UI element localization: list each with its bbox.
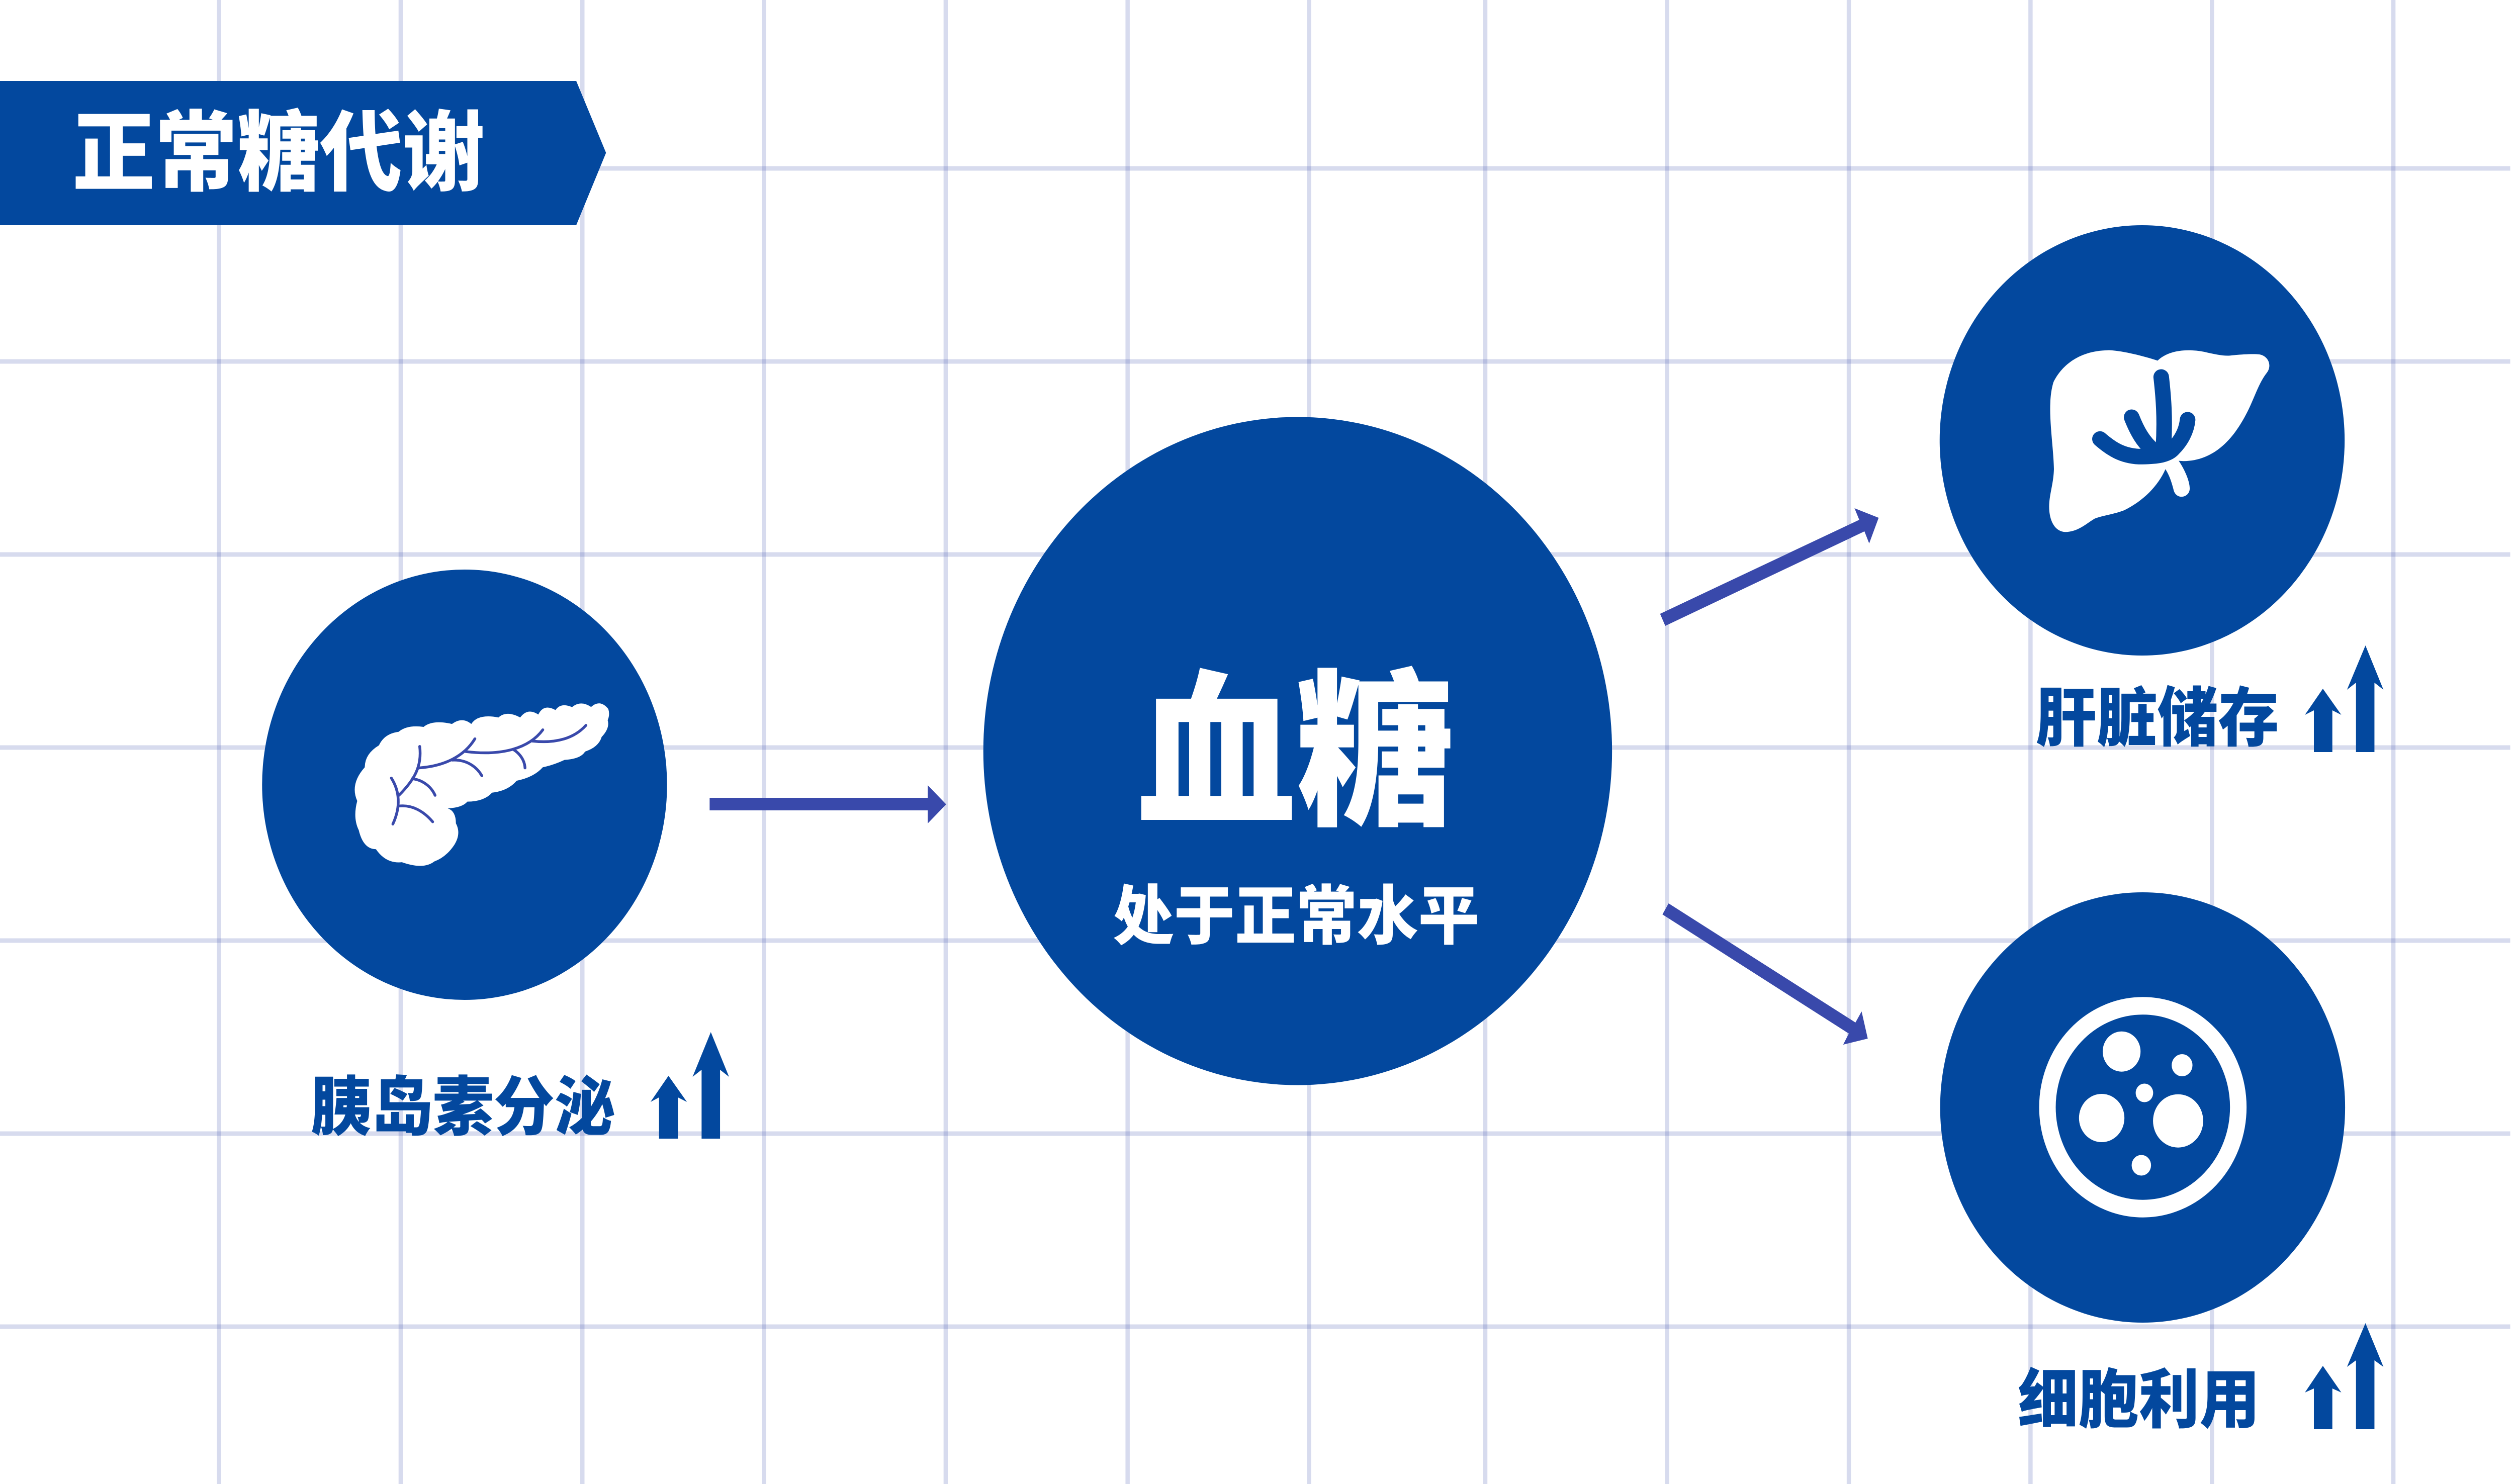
label: cell utilization: 细胞利用 bbox=[2018, 1365, 2260, 1436]
panel: cell circle bbox=[1940, 892, 2345, 1323]
text: at normal level: 处于正常水平 bbox=[1113, 881, 1479, 953]
icon: up arrows cell bbox=[2305, 1323, 2383, 1429]
icon: up arrows insulin bbox=[651, 1032, 729, 1139]
icon: pancreas bbox=[354, 703, 609, 866]
arrow: blood sugar to liver bbox=[1660, 508, 1878, 626]
icon: liver bbox=[2049, 350, 2269, 532]
panel: blood sugar circle bbox=[983, 417, 1612, 1085]
title text: 正常糖代谢 bbox=[72, 104, 485, 202]
arrow: pancreas to blood sugar bbox=[709, 785, 946, 823]
icon: cell bbox=[2047, 1006, 2238, 1209]
title banner bbox=[0, 81, 606, 225]
label: insulin secretion: 胰岛素分泌 bbox=[311, 1072, 615, 1144]
heading: blood sugar: 血糖 bbox=[1137, 659, 1454, 847]
label: liver storage: 肝脏储存 bbox=[2036, 683, 2279, 755]
arrow: blood sugar to cell bbox=[1662, 903, 1868, 1045]
panel: liver circle bbox=[1940, 225, 2345, 656]
icon: up arrows liver bbox=[2305, 645, 2383, 752]
panel: pancreas circle bbox=[262, 570, 667, 1000]
